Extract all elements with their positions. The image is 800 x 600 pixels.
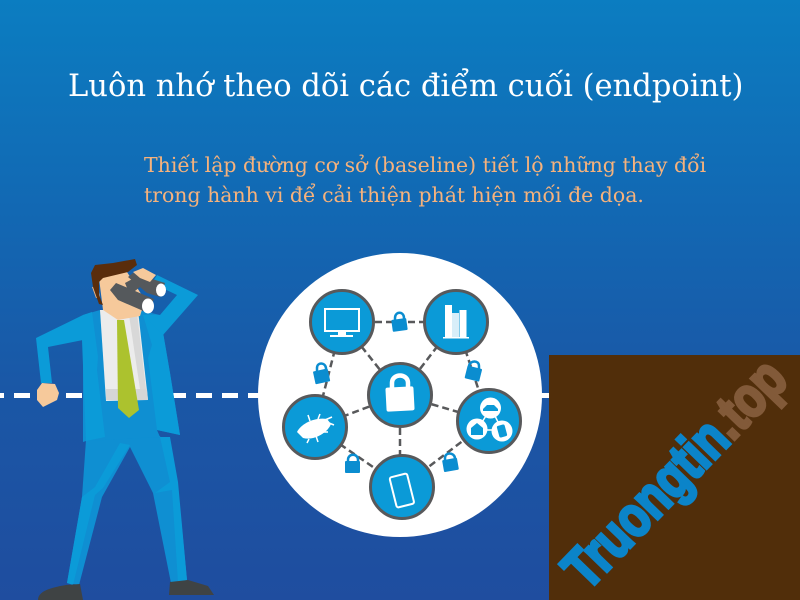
subtitle text block: Thiết lập đường cơ sở (baseline) tiết lộ những thay đổi [144,153,706,177]
neck and face [99,272,145,320]
dashed horizon line [0,393,560,398]
small padlocks [313,313,482,473]
white disc [258,253,542,537]
subtitle text block: trong hành vi để cải thiện phát hiện mối đe dọa. [144,183,644,207]
tie [117,320,139,418]
node: central lock [368,364,432,426]
node: monitor [310,290,374,354]
jacket [82,310,180,442]
node: bar chart [424,290,488,354]
node: bug [284,396,346,458]
left arm [36,315,83,383]
endpoint network diagram [258,253,542,537]
subtitle text block [144,153,706,207]
hair [91,259,137,305]
shoes [38,580,214,600]
hand [37,383,59,407]
raised arm [143,275,198,335]
node: smartphone [370,456,434,518]
trousers [67,436,187,585]
dashed connectors [315,322,489,487]
watermark panel [549,347,800,600]
shirt [100,310,148,401]
node: connected things [458,390,520,452]
title: Luôn nhớ theo dõi các điểm cuối (endpoint) [68,69,743,104]
illustration: businessman with binoculars [36,259,214,600]
binoculars [110,268,166,314]
ear [92,286,100,298]
